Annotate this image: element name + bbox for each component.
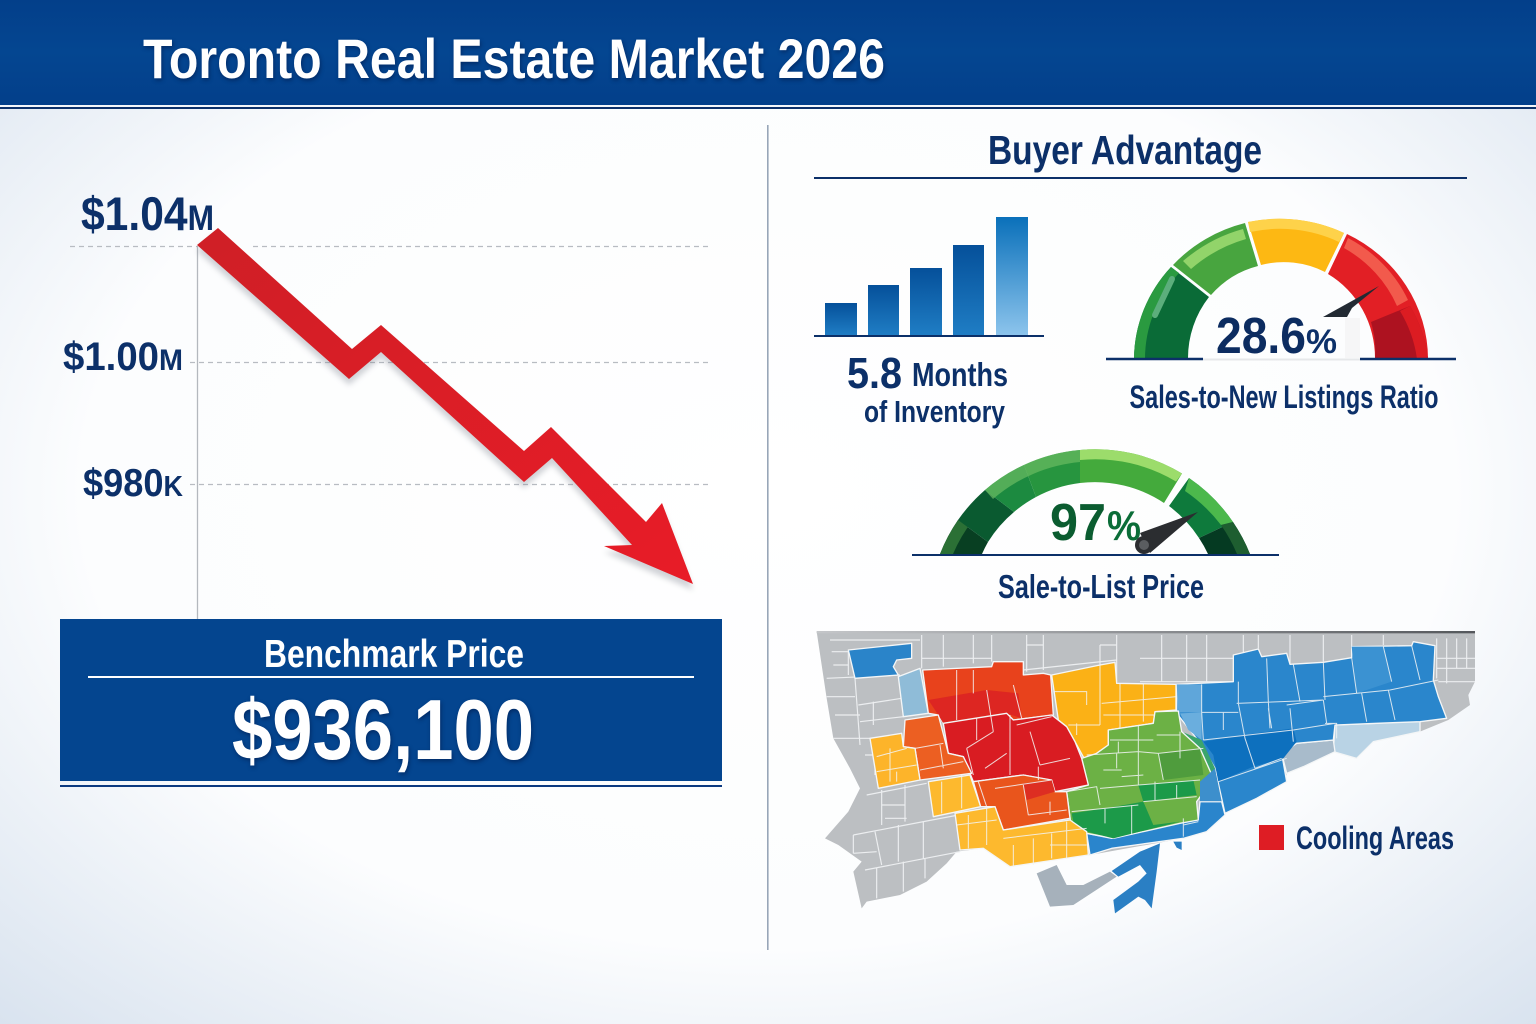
- toronto map: [817, 631, 1475, 913]
- benchmark price panel: [60, 619, 722, 787]
- falling red arrow: [197, 228, 693, 590]
- bar chart: months of inventory: [814, 217, 1044, 429]
- legend label: Cooling Areas: [1296, 820, 1454, 856]
- bar chart: months of inventory: of Inventory: [864, 394, 1006, 429]
- gauge needle: [1323, 286, 1379, 317]
- legend swatch: [1259, 825, 1284, 850]
- inventory label: 5.8: [847, 349, 902, 398]
- gauge value: 97: [1050, 494, 1106, 552]
- axis label: $980K: $980K: [83, 462, 183, 505]
- benchmark value: $936,100: [232, 683, 534, 778]
- gauge value: 28.6: [1216, 307, 1306, 364]
- gauge: sales-to-new listings ratio: %: [1306, 323, 1337, 361]
- gauge label: Sale-to-List Price: [998, 568, 1204, 605]
- section heading: buyer advantage: Buyer Advantage: [988, 127, 1262, 173]
- gauge: sale-to-list price: %: [1107, 502, 1141, 549]
- gauge: sales-to-new listings ratio: [1106, 219, 1456, 415]
- gauge needle: [1135, 512, 1198, 554]
- price line chart: [63, 187, 708, 620]
- panel label: Benchmark Price: [264, 633, 524, 676]
- title: Toronto Real Estate Market 2026: [143, 27, 885, 90]
- center divider: [767, 125, 769, 950]
- gauge: sale-to-list price: [912, 449, 1279, 605]
- axis label: $1.04M: $1.04M: [81, 187, 214, 240]
- axis label: $1.00M: $1.00M: [63, 335, 183, 379]
- legend: cooling areas: [1259, 820, 1454, 856]
- bar chart: months of inventory: Months: [912, 356, 1008, 393]
- header banner: [0, 0, 1536, 109]
